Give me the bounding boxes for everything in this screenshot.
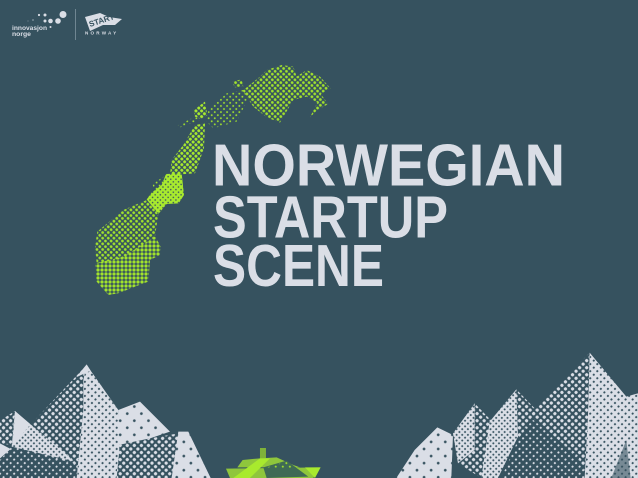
ship upper deck (237, 457, 300, 467)
map: western Norway (95, 200, 158, 263)
flag text: START (88, 12, 116, 29)
logo divider (75, 9, 76, 40)
title line 1: NORWEGIAN (212, 132, 565, 198)
big peak dark facet (501, 418, 588, 478)
small peak west face (0, 411, 15, 445)
title line 3: SCENE (213, 232, 384, 299)
peak 3 light (481, 389, 518, 478)
left peak east face (77, 365, 119, 478)
peak 2 (453, 403, 475, 463)
norway text: NORWAY (85, 30, 118, 36)
right mountains (396, 353, 638, 478)
peak 3 east (516, 389, 536, 440)
ship (226, 448, 321, 478)
left peak tip (76, 364, 91, 377)
small peak east face (12, 411, 75, 462)
far-right dark edge (611, 440, 631, 478)
logo: Start Up Norway (85, 12, 122, 36)
map: Trondelag (147, 173, 184, 214)
big peak east face (585, 353, 638, 478)
map: Finnmark (243, 65, 331, 123)
map: Troms fade (207, 90, 248, 128)
logo: Innovasjon Norge (12, 11, 66, 38)
logo: Innovasjon Norge: norge (12, 31, 32, 38)
big peak west face (531, 353, 590, 478)
title line 2: STARTUP (213, 184, 448, 250)
ship hull (226, 467, 320, 478)
ship bright facets (233, 458, 270, 478)
second peak (118, 402, 170, 445)
map of Norway (95, 65, 331, 295)
map: north islands (232, 79, 243, 87)
right facet (172, 432, 211, 478)
ship funnel (260, 448, 266, 459)
ship dark facet (263, 461, 308, 478)
peak 1 dark detail (418, 457, 451, 478)
left mountains (0, 364, 211, 478)
corner facet (0, 443, 11, 458)
map: southern Norway (95, 237, 161, 295)
map: west fringe (177, 117, 200, 127)
icon: logo dots (28, 11, 67, 28)
second peak base (117, 433, 178, 478)
lower-left dark facet (0, 447, 78, 478)
map: Tromso cluster (193, 102, 207, 119)
left peak west face (13, 365, 118, 478)
peak 1 light (396, 427, 453, 478)
logo wordmark: innovasjon (12, 25, 47, 32)
icon: flag (85, 13, 122, 31)
map: Nordland (170, 123, 205, 175)
title (212, 132, 565, 299)
